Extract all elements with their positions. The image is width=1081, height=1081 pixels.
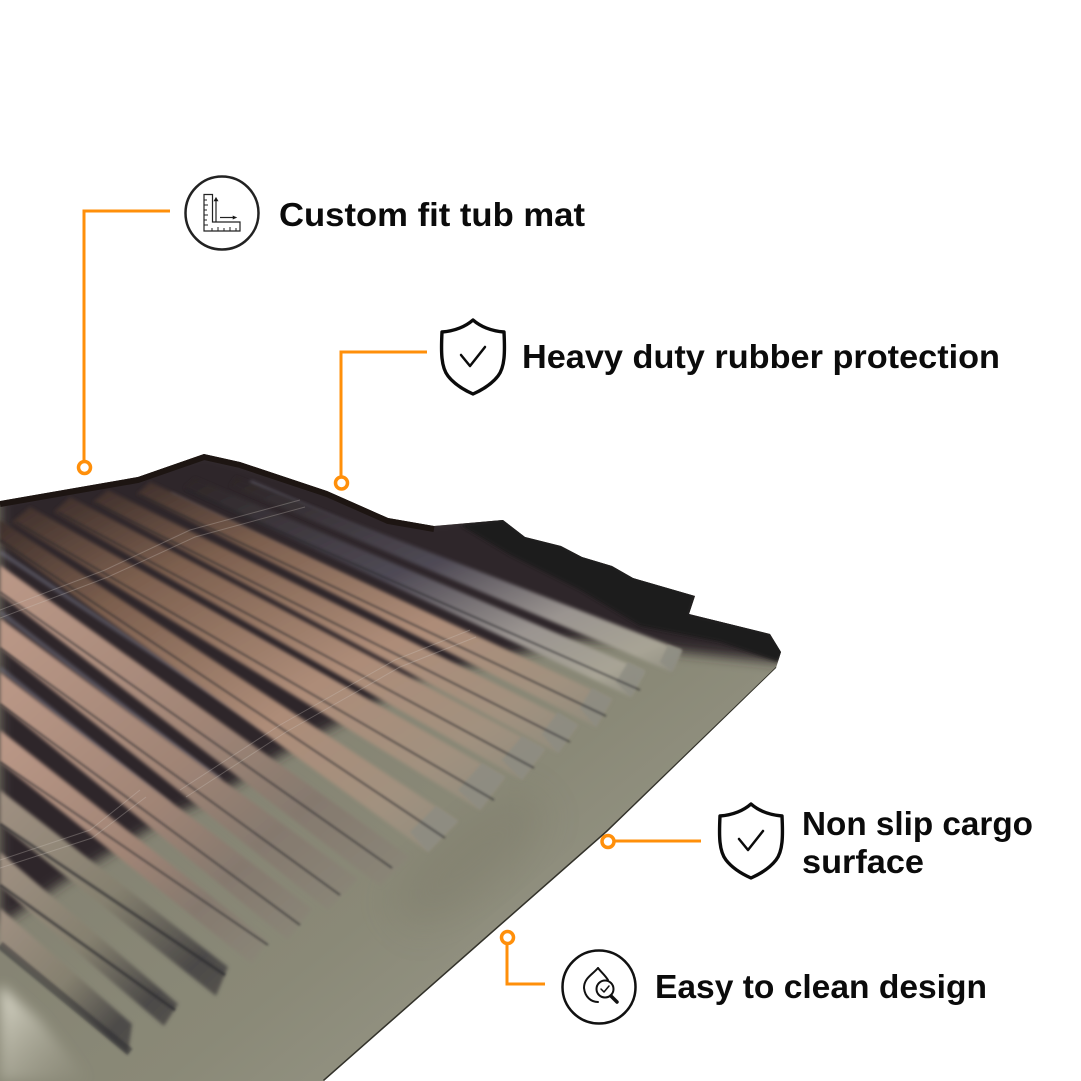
rib tip facets [410,645,682,852]
heading: non slip [802,805,1033,880]
light reflection, lower left [0,983,67,1081]
icon: shield check [442,320,504,394]
raised dark rim, right corner [460,518,785,662]
callout: custom fit [78,211,170,474]
callout: heavy duty [336,352,427,489]
heading: easy to clean: Easy to clean design [655,968,987,1005]
heading: heavy duty: Heavy duty rubber protection [522,338,1000,375]
callout: non slip [602,836,701,848]
icon: shield check [720,804,782,878]
front edge [324,668,777,1081]
olive smudge on flat front area [379,775,561,945]
icon: water drop with magnifier [562,950,636,1024]
lavender gap sheen [0,480,322,796]
icon: ruler square [186,176,258,250]
rib edge lines [0,490,640,1052]
callout: easy to clean [502,932,545,984]
heading: non slip: surface [802,843,924,880]
cross-rib ripple lines [0,500,476,868]
product: rubber tub mat [0,448,790,1081]
heading: custom fit: Custom fit tub mat [279,196,585,233]
heading: non slip: Non slip cargo [802,805,1033,842]
dark shadow region, upper mat [0,448,790,925]
top lip [0,457,434,529]
cargo ribs [0,477,682,1054]
